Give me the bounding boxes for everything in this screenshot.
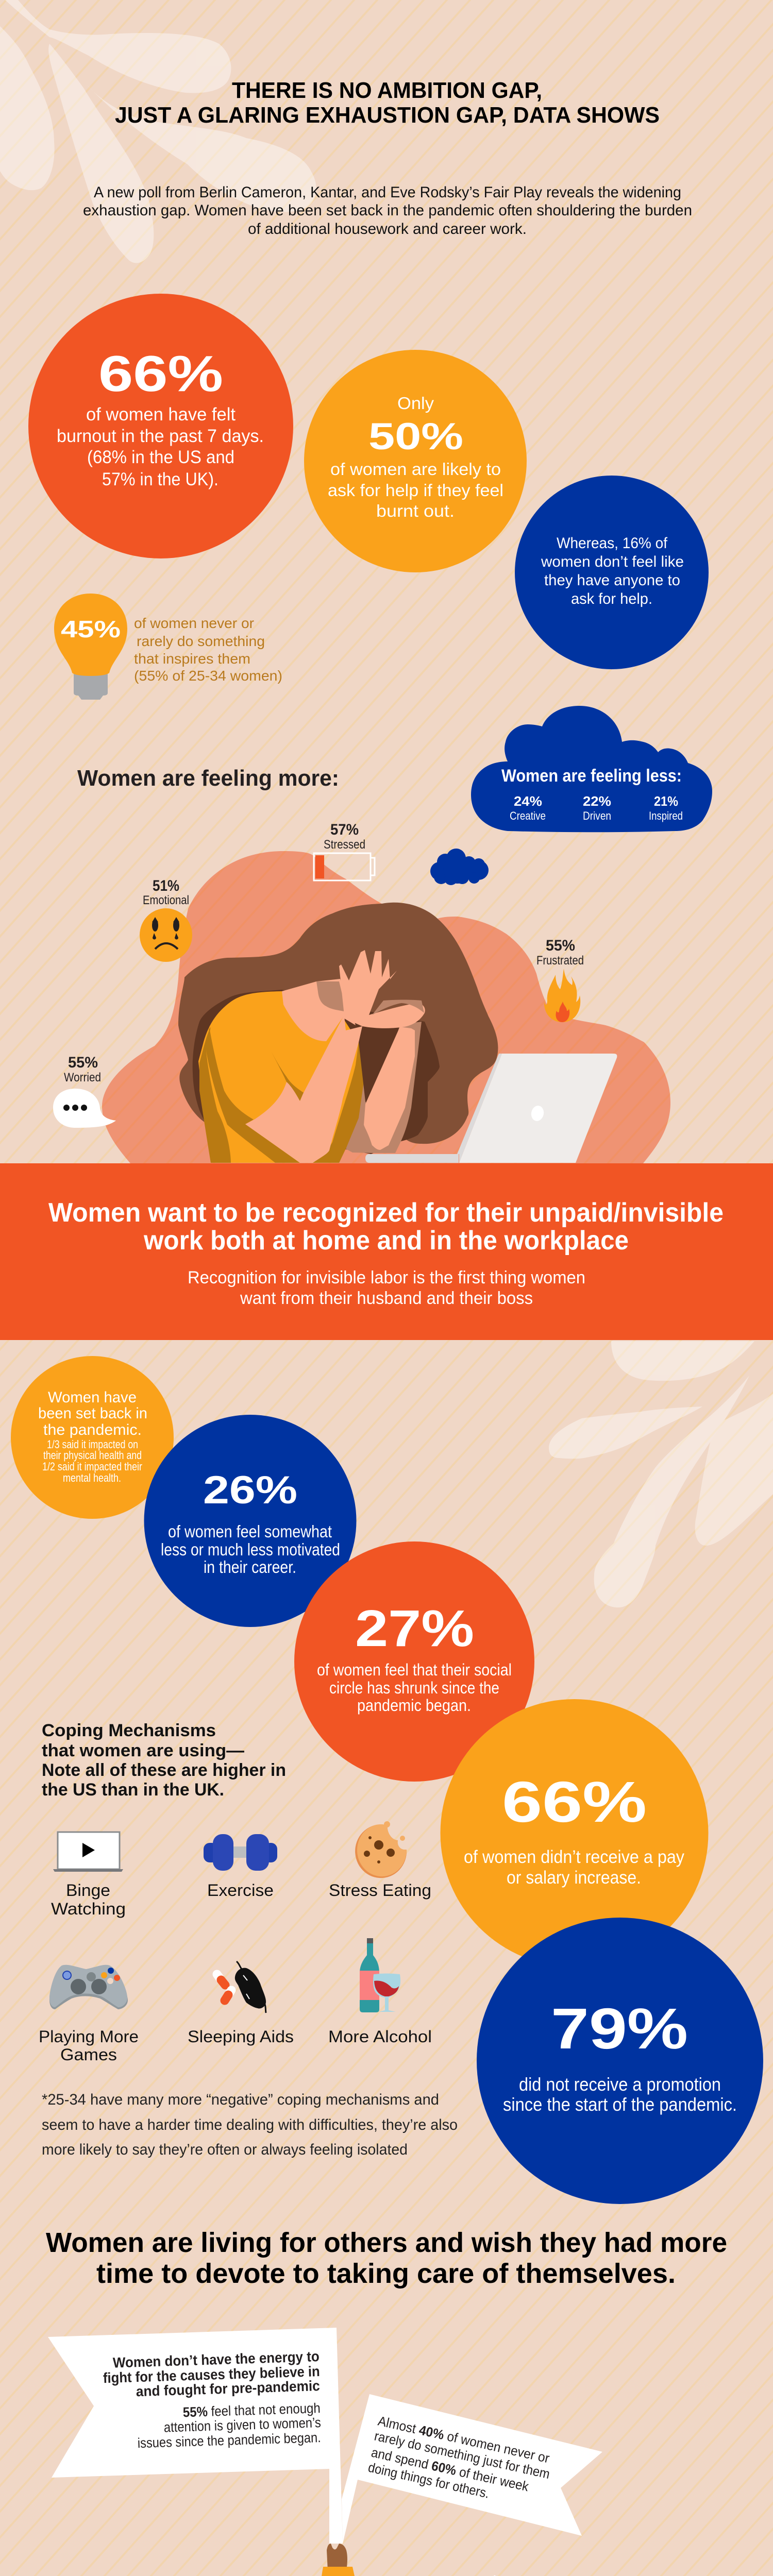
text: burnout description: 57% in the UK). (102, 469, 219, 489)
text: ask for help description: of women are likely to (330, 460, 501, 479)
decorative leaves top left (0, 0, 316, 263)
heading: living for others: Women are living for others and wish they had more (46, 2227, 727, 2258)
coping item: sleeping aids (188, 1961, 294, 2046)
panel: 16% blue circle: women don’t feel like (541, 553, 684, 570)
stat: 24% creative (510, 793, 546, 822)
illustration: flag left (48, 2328, 343, 2544)
icon: light bulb (54, 594, 127, 700)
text: pay: of women didn’t receive a pay (464, 1847, 684, 1867)
coping item: binge watching (51, 1832, 126, 1918)
panel: 16% blue circle: ask for help. (571, 590, 652, 607)
callout: 55% worried (53, 1054, 116, 1128)
coping item: more alcohol (328, 1938, 432, 2046)
heading: women are feeling more: Women are feeling more: (77, 766, 339, 791)
title (115, 78, 660, 128)
intro paragraph: A new poll from Berlin Cameron, Kantar, and Eve Rodsky’s Fair Play reveals the widening (94, 184, 681, 201)
callout: 55% frustrated: Frustrated (536, 954, 584, 968)
panel: 16% blue circle: Whereas, 16% of (557, 535, 668, 552)
heading: recognition: work both at home and in the workplace (143, 1226, 629, 1256)
text: recognition subhead: want from their husband and their boss (240, 1289, 533, 1308)
text: social circle: of women feel that their social (317, 1660, 512, 1679)
panel: 26% motivation circle (144, 1415, 357, 1627)
coping item: playing more games (39, 1965, 139, 2064)
text: ask for help description: burnt out. (376, 501, 455, 520)
note: 25-34 age group: seem to have a harder time dealing with difficulties, they’re also (42, 2116, 458, 2133)
text: energy to fight: Women don’t have the energy to (112, 2348, 320, 2371)
stat: 21% inspired: 21% (654, 793, 678, 809)
coping item: sleeping aids: Sleeping Aids (188, 2027, 294, 2046)
coping item: playing more games: Playing More (39, 2027, 139, 2046)
text: burnout description (57, 404, 264, 489)
text: energy to fight: fight for the causes they believe in (103, 2363, 320, 2386)
stat: 66%: 66% (98, 345, 223, 402)
icon: crying face (140, 908, 192, 962)
text: pay: or salary increase. (507, 1868, 641, 1888)
panel: 16% blue circle: they have anyone to (544, 572, 680, 589)
text: set back: the pandemic. (43, 1421, 142, 1438)
text: set back (38, 1389, 147, 1438)
face shade (316, 981, 344, 1011)
text: 55% attention (137, 2400, 321, 2451)
text: 55% attention: issues since the pandemic began. (137, 2430, 321, 2451)
text: ask for help description (328, 460, 503, 520)
text: inspires them: rarely do something (137, 633, 265, 649)
coping item: more alcohol: More Alcohol (328, 2027, 432, 2046)
right forearm (364, 1027, 415, 1150)
text: health impact: 1/3 said it impacted on (47, 1438, 138, 1451)
note: 25-34 age group: *25-34 have many more “negative” coping mechanisms and (42, 2091, 439, 2108)
callout: 51% emotional: 51% (153, 877, 179, 894)
coping item: stress eating: Stress Eating (329, 1881, 431, 1900)
shade behind forearm (346, 1022, 422, 1153)
callout: 55% worried: 55% (68, 1054, 98, 1071)
text: burnout description: of women have felt (86, 404, 236, 425)
text: only: Only (397, 394, 434, 413)
text: social circle: pandemic began. (357, 1696, 471, 1715)
stat: 66%: 66% (502, 1770, 647, 1834)
stat: 21% inspired (649, 793, 683, 822)
stat: 22% driven (583, 793, 611, 822)
stat: 24% creative: Creative (510, 809, 546, 822)
text: 40 percent: doing things for others. (367, 2460, 491, 2501)
shirt (198, 991, 367, 1163)
stat: 21% inspired: Inspired (649, 809, 683, 822)
raised arm (264, 2567, 363, 2576)
text: motivation: less or much less motivated (161, 1540, 340, 1559)
callout: 57% stressed: Stressed (324, 838, 365, 852)
stat: 79%: 79% (551, 1996, 688, 2061)
stat: 24% creative: 24% (514, 793, 542, 809)
text: motivation: of women feel somewhat (168, 1522, 332, 1541)
icon: sleep mask and pills (217, 1961, 266, 2013)
intro paragraph: of additional housework and career work. (248, 221, 527, 238)
raised hand (327, 2544, 347, 2571)
text: motivation (161, 1522, 340, 1577)
text: inspires them (134, 615, 282, 684)
heading: recognition: Women want to be recognized for their unpaid/invisible (48, 1198, 724, 1228)
title: JUST A GLARING EXHAUSTION GAP, DATA SHOWS (115, 103, 660, 128)
cheek shade (372, 999, 424, 1015)
text: health impact: their physical health and (43, 1449, 142, 1462)
coping item: stress eating (329, 1821, 431, 1900)
text: promotion: did not receive a promotion (519, 2074, 721, 2095)
panel: 27% social circle (294, 1541, 534, 1782)
coping item: binge watching: Binge (66, 1881, 110, 1900)
text: recognition subhead: Recognition for invisible labor is the first thing women (188, 1268, 585, 1287)
text: pay (464, 1847, 684, 1888)
heading: coping mechanisms: that women are using— (42, 1741, 244, 1760)
coping item: exercise (204, 1834, 277, 1900)
text: inspires them: (55% of 25-34 women) (134, 668, 282, 684)
coping item: binge watching: Watching (51, 1900, 126, 1918)
stat: 26%: 26% (203, 1468, 297, 1512)
decorative leaves right (549, 1341, 773, 1607)
text: 40 percent (367, 2413, 551, 2501)
text: motivation: in their career. (204, 1557, 296, 1577)
text: inspires them: of women never or (134, 615, 254, 631)
illustration: flag right (342, 2394, 602, 2544)
callout: 57% stressed: 57% (330, 821, 359, 838)
illustration: salmon blob (102, 851, 670, 1163)
shirt shadows (199, 1027, 367, 1163)
illustration: woman slumped on desk (56, 2544, 541, 2576)
icon: low battery (314, 853, 375, 880)
callout: 57% stressed (314, 821, 375, 880)
text: promotion: since the start of the pandemic. (503, 2094, 737, 2115)
text: ask for help description: ask for help if they feel (328, 481, 503, 500)
title: THERE IS NO AMBITION GAP, (232, 78, 542, 103)
text: 40 percent: Almost 40% of women never or (377, 2413, 551, 2466)
heading: coping mechanisms: the US than in the UK. (42, 1780, 224, 1800)
heading: recognition (48, 1198, 724, 1256)
hair back (178, 903, 498, 1144)
dark hair lock (359, 1025, 400, 1108)
text: 40 percent: and spend 60% of their week (370, 2445, 531, 2495)
panel: 16% blue circle (515, 476, 709, 669)
icon: flame (544, 969, 580, 1022)
callout: 55% frustrated: 55% (546, 937, 575, 954)
coping item: playing more games: Games (60, 2045, 117, 2064)
text: promotion (503, 2074, 737, 2115)
hair dark inner (193, 990, 440, 1154)
text: feeling less: Women are feeling less: (501, 766, 682, 786)
stat: 50%: 50% (368, 416, 463, 457)
note: 25-34 age group: more likely to say they’re often or always feeling isolated (42, 2141, 408, 2158)
text: energy to fight (103, 2348, 320, 2399)
face and chest (282, 979, 356, 1041)
icon: cookie (355, 1821, 407, 1878)
heading: coping mechanisms (42, 1721, 286, 1800)
panel: set back yellow circle (11, 1356, 174, 1519)
text: burnout description: (68% in the US and (87, 447, 234, 467)
text: recognition subhead (188, 1268, 585, 1308)
text: set back: been set back in (38, 1405, 147, 1422)
text: set back: Women have (48, 1389, 137, 1406)
panel: 66% burnout circle (28, 294, 293, 558)
illustration: exhausted woman at laptop (178, 903, 617, 1163)
heading: living for others (46, 2227, 727, 2289)
stat: 27%: 27% (355, 1600, 474, 1657)
icon: speech bubble (53, 1089, 116, 1128)
callout: 51% emotional (140, 877, 192, 962)
stat: 22% driven: 22% (583, 793, 611, 809)
stat: 45%: 45% (61, 616, 121, 642)
icon: wine bottle and glass (360, 1938, 400, 2012)
callout: 51% emotional: Emotional (143, 893, 189, 907)
text: 55% attention: 55% feel that not enough (182, 2400, 321, 2420)
heading: living for others: time to devote to taking care of themselves. (96, 2258, 676, 2289)
arm and hand (245, 950, 425, 1163)
icon: laptop with play (53, 1832, 123, 1872)
icon: dumbbell (204, 1834, 277, 1871)
text: 55% attention: attention is given to women’s (163, 2415, 321, 2435)
text: burnout description: burnout in the past 7 days. (57, 426, 264, 446)
stat: 22% driven: Driven (583, 809, 611, 822)
panel: 79% promotion circle (477, 1918, 763, 2204)
icon: game controller (49, 1965, 128, 2009)
text: health impact (42, 1438, 142, 1484)
panel: recognition banner (0, 1163, 773, 1340)
note: 25-34 age group (42, 2091, 458, 2158)
intro paragraph (83, 184, 692, 238)
panel: feeling less cloud (471, 706, 712, 832)
panel: 50% ask for help circle (304, 350, 527, 572)
text: health impact: 1/2 said it impacted their (42, 1460, 142, 1473)
text: energy to fight: and fought for pre-pandemic (136, 2378, 320, 2399)
text: inspires them: that inspires them (134, 651, 250, 667)
coping item: exercise: Exercise (207, 1881, 274, 1900)
callout: 55% worried: Worried (64, 1071, 101, 1084)
icon: laptop (365, 1054, 617, 1163)
text: health impact: mental health. (63, 1471, 121, 1484)
callout: 55% frustrated (536, 937, 584, 1022)
icon: small blue cloud (430, 849, 489, 885)
heading: coping mechanisms: Note all of these are higher in (42, 1760, 286, 1780)
text: social circle (317, 1660, 512, 1715)
heading: coping mechanisms: Coping Mechanisms (42, 1721, 216, 1740)
text: social circle: circle has shrunk since the (329, 1679, 499, 1697)
panel: 45% light bulb (54, 594, 282, 700)
panel: 66% pay circle (440, 1699, 708, 1967)
intro paragraph: exhaustion gap. Women have been set back in the pandemic often shouldering the burden (83, 202, 692, 219)
text: 40 percent: rarely do something just for them (373, 2428, 551, 2482)
